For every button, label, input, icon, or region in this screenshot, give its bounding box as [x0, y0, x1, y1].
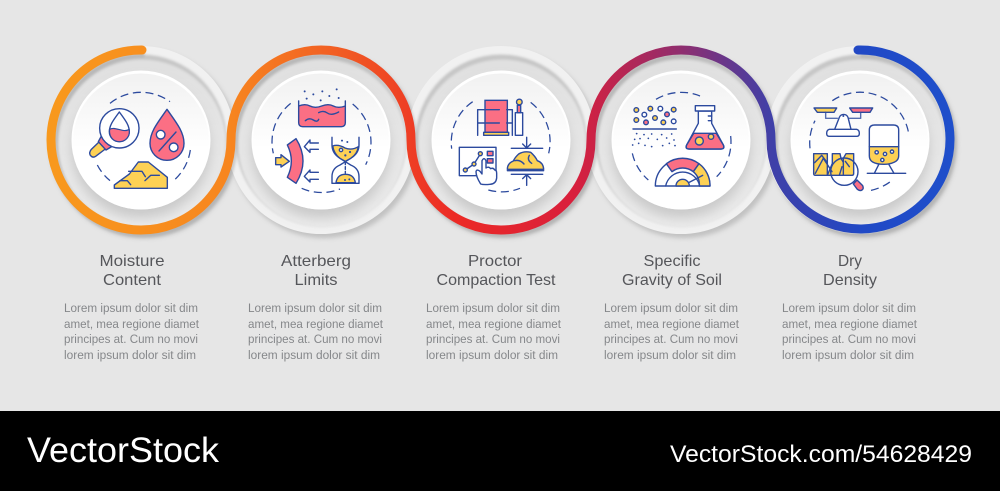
icon: atterberg limits — [272, 88, 371, 193]
label: proctor compaction test: Proctor — [468, 253, 523, 270]
text block: dry density — [782, 301, 918, 362]
label: dry density: Density — [823, 272, 877, 289]
label: atterberg limits: Atterberg — [281, 253, 351, 270]
text block: dry density: amet, mea regione diamet — [782, 317, 918, 331]
text block: atterberg limits: lorem ipsum dolor sit dim — [248, 348, 380, 362]
text block: specific gravity of soil: Lorem ipsum dolor sit dim — [604, 301, 738, 315]
label: specific gravity of soil: Gravity of Soil — [622, 272, 722, 289]
label: dry density — [823, 253, 877, 289]
text block: dry density: Lorem ipsum dolor sit dim — [782, 301, 916, 315]
icon: proctor compaction test — [451, 99, 550, 192]
text block: dry density: lorem ipsum dolor sit dim — [782, 348, 914, 362]
text block: atterberg limits — [248, 301, 384, 362]
icon: specific gravity of soil — [632, 92, 731, 186]
text block: atterberg limits: principes at. Cum no movi — [248, 332, 382, 346]
text block: moisture content — [64, 301, 200, 362]
text block: specific gravity of soil: lorem ipsum dolor sit dim — [604, 348, 736, 362]
text block: specific gravity of soil — [604, 301, 740, 362]
text block: moisture content: amet, mea regione diamet — [64, 317, 200, 331]
label: atterberg limits — [281, 253, 351, 289]
text block: moisture content: principes at. Cum no movi — [64, 332, 198, 346]
footer image id: VectorStock.com/54628429 — [670, 441, 972, 468]
icon: moisture content — [90, 92, 190, 188]
text block: dry density: principes at. Cum no movi — [782, 332, 916, 346]
label: moisture content — [100, 253, 165, 289]
label: proctor compaction test — [436, 253, 556, 289]
text block: proctor compaction test: principes at. Cum no movi — [426, 332, 560, 346]
footer logo text: VectorStock — [27, 431, 220, 470]
footer bar — [0, 411, 1000, 491]
ring bases — [47, 46, 957, 238]
text block: atterberg limits: amet, mea regione diamet — [248, 317, 384, 331]
label: moisture content: Content — [103, 272, 162, 289]
text block: atterberg limits: Lorem ipsum dolor sit dim — [248, 301, 382, 315]
text block: specific gravity of soil: amet, mea regione diamet — [604, 317, 740, 331]
label: moisture content: Moisture — [100, 253, 165, 270]
label: dry density: Dry — [838, 253, 862, 270]
gradient ribbon line — [51, 50, 950, 230]
text block: proctor compaction test: lorem ipsum dolor sit dim — [426, 348, 558, 362]
text block: proctor compaction test — [426, 301, 562, 362]
text block: specific gravity of soil: principes at. Cum no movi — [604, 332, 738, 346]
text block: proctor compaction test: amet, mea regione diamet — [426, 317, 562, 331]
text block: moisture content: lorem ipsum dolor sit dim — [64, 348, 196, 362]
label: atterberg limits: Limits — [294, 272, 338, 289]
label: specific gravity of soil — [622, 253, 722, 289]
icon: dry density — [810, 92, 908, 191]
text block: moisture content: Lorem ipsum dolor sit dim — [64, 301, 198, 315]
ribbon shadow — [54, 53, 952, 234]
label: proctor compaction test: Compaction Test — [436, 272, 556, 289]
text block: proctor compaction test: Lorem ipsum dolor sit dim — [426, 301, 560, 315]
label: specific gravity of soil: Specific — [644, 253, 700, 270]
